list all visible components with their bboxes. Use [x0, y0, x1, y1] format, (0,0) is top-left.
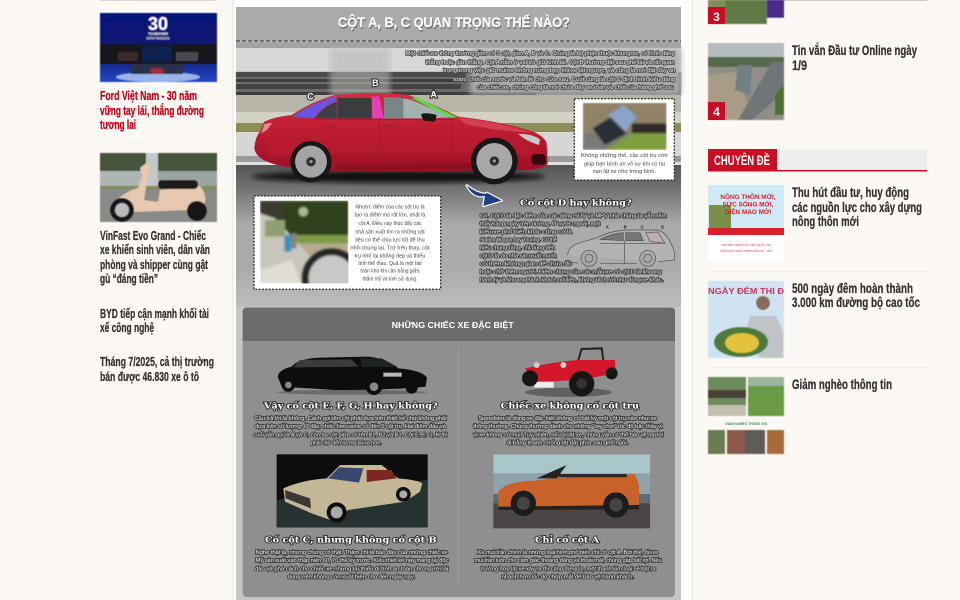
headline: Ford: Ford Việt Nam - 30 năm	[100, 89, 197, 103]
heading: Có cột D hay không?	[520, 197, 632, 208]
heading: no pillar car: Chiếc xe không có cột trụ	[501, 399, 639, 411]
text: limousine	[253, 416, 448, 447]
panel: lower special cars	[255, 454, 662, 580]
intro paragraph: thẳng hoặc gần thẳng. Cột A nằm ở vai trò giữ kính lái. Cột B thường đặt sau ghế lái và rất quan	[426, 59, 675, 66]
pillar D text: hoặc chở thêm người. Điểm chung của các mẫu xe có cột D là khoang	[480, 269, 662, 276]
text: no pillar car: thông thường. Chúng thường dành cho những "tay chơi" tốc độ bậc thầy vì	[473, 424, 663, 430]
photo: motion-blurred road background	[236, 42, 681, 307]
blind spot text: tính thể thao. Quả là một bài	[358, 260, 422, 267]
headline: 500 ngay dem: 500 ngày đêm hoàn thành	[792, 281, 913, 296]
sketch: hatchback with four pillars	[568, 230, 674, 266]
text: limousine: phải chờ đến tương lai xa hơn.	[311, 441, 382, 447]
text: convertible: mui trần luôn cho cảm giác thoáng đãng và thoải mái, chúng gặp bất lợi. Nếu	[474, 558, 662, 564]
headline: VinFast	[100, 229, 210, 286]
sketch pillar labels: C	[641, 225, 644, 230]
headline: VinFast: gù “đáng tiền”	[100, 272, 158, 286]
image: Ford 30 years event: 30	[148, 14, 168, 34]
badge 3: 3	[713, 10, 720, 24]
text: no pillar car: đi bằng thanh chống lật đặt phía sau ghế ngồi.	[507, 440, 628, 447]
title: CỘT A, B, C QUAN TRỌNG THẾ NÀO?	[339, 14, 571, 32]
text: convertible: nhanh hơn tốc độ chớp mắt để bảo vệ hành khách.	[502, 573, 634, 580]
section header	[243, 308, 675, 341]
pillar D text: hành lý và khoang hành khách nối liền, không tách rời như dòng xe khác.	[480, 278, 663, 284]
headline: Thu hut dau tu: Thu hút đầu tư, huy động	[792, 185, 909, 200]
callout: blind spot	[253, 195, 442, 290]
intro paragraph: trọng trong việc giữ mui xe không nứng bẹp khi xe lật ngược, và cũng là nơi đặt dây an	[443, 68, 675, 74]
section header: NHỮNG CHIẾC XE ĐẶC BIỆT	[392, 320, 514, 330]
pillar D text: Có. Cột D là đặc điểm của các dòng SUV và MPV nhà chúng ta vẫn nhìn	[480, 212, 667, 219]
section heading: Chuyen de: CHUYÊN ĐỀ	[714, 153, 770, 168]
text: convertible	[474, 549, 662, 580]
image: classic beige coupe	[277, 454, 428, 527]
intro paragraph: của chiếc xe, chúng cũng là nơi chứa dây an toàn và chốt của hàng ghế sau	[477, 84, 674, 91]
text: no pillar car: Speedster là dòng xe đặc biệt không có bất kỳ một cột trụ nào như xe	[478, 416, 657, 422]
heading: convertible: Chỉ có cột A	[535, 534, 599, 545]
text: coupe: dung nên không còn xuất hiện cho đến ngày nay.	[288, 574, 415, 580]
blind spot text: tạo ra điểm mù rất lớn, nhất là	[355, 212, 425, 219]
text: no pillar car	[473, 416, 663, 447]
blind spot text: thẩm mỹ và tính sử dụng.	[362, 276, 417, 283]
headline: VinFast: phòng và shipper cùng gật	[100, 258, 209, 272]
image: rural development poster	[708, 185, 784, 261]
headline: Tin van: 1/9	[792, 58, 807, 73]
panel: left news sidebar	[100, 0, 217, 384]
image: rank 3 thumbnail	[708, 0, 784, 24]
text: limousine: Câu trả lời là không. Cách gọi tên cột phải dựa trên thiết kế chứ không phải	[254, 416, 447, 422]
headline: BYD	[100, 307, 209, 335]
image: black limousine	[277, 357, 427, 395]
image: rural development poster: CHƯƠNG TRÌNH MỤC TIÊU QUỐC GIA	[721, 244, 771, 247]
callout caption: nạn lật xe như trong hình.	[593, 169, 656, 175]
blind spot text: trụ nhỏ lại không đẹp và thiếu	[355, 253, 425, 260]
image: highway interchange	[708, 43, 784, 120]
callout: rollover photo	[574, 99, 674, 180]
pillar D text: hiểu chung rằng, chỉ dùng đến	[480, 245, 555, 252]
pillar D text: Station Wagon hay Touring. Có thể	[480, 237, 557, 244]
image: red speedster	[522, 348, 618, 397]
image: orange convertible SUV	[493, 454, 650, 528]
sketch pillar labels: B	[624, 225, 627, 230]
sketch pillar labels: A	[606, 225, 610, 230]
headline: Ford: vững tay lái, thắng đường	[100, 103, 204, 118]
headline: July 2025 sales	[100, 355, 214, 384]
headline: Giam ngheo: Giảm nghèo thông tin	[792, 377, 892, 392]
arrow: to pillar D section	[467, 185, 502, 206]
callout caption: Không những thế, các cột trụ còn	[581, 153, 668, 159]
pillar D text	[480, 212, 667, 284]
text: limousine: dựa trên số lượng. Ở đây, chiếc limousine có đến 5 cột trụ. Hai điểm đầu và	[255, 423, 446, 430]
heading: limousine: Vậy có cột E, F, G, H hay không?	[263, 400, 438, 411]
image: poverty reduction collage: GIẢM NGHÈO THÔNG TIN	[725, 421, 767, 426]
pillar D text: cột D là do nhà sản xuất muốn	[480, 254, 557, 260]
image: poverty reduction collage	[708, 377, 784, 454]
image: rural development poster: XÂY DỰNG NÔNG THÔN MỚI 2021 - 2025	[720, 250, 773, 253]
blind spot text: cột A. Điều này thúc đẩy các	[358, 220, 422, 227]
callout caption	[581, 153, 668, 175]
headline: 500 ngay dem	[792, 281, 920, 310]
rear wheel	[290, 141, 332, 182]
image: Ford 30 years event: TOGETHER	[148, 32, 168, 36]
blind spot text: toán khó khi cân bằng giữa	[360, 268, 420, 275]
headline: July 2025 sales: Tháng 7/2025, cả thị trường	[100, 355, 214, 369]
text: convertible: Xe mui trần chính là những loại hình phổ biến chỉ có cột A. Bởi thế, dù xe	[478, 549, 658, 556]
headline: BYD: BYD tiếp cận mạnh khối tài	[100, 307, 209, 321]
sketch pillar labels: D	[661, 225, 664, 230]
front wheel	[471, 138, 518, 184]
blind spot text: Nhược điểm của các cột trụ là	[355, 203, 425, 210]
pillar C highlight	[292, 96, 336, 118]
pillar B highlight	[372, 97, 384, 118]
section heading: Chuyen de	[708, 149, 927, 172]
text: coupe: đáo và phá cách cho chiếc xe nhưng lại thiếu đi tính an toàn cho người lái	[255, 566, 448, 572]
pillar D text: thấy hàng ngày trên đường. Ở nước ngoài, một	[480, 220, 601, 227]
blind spot text: nhà sản xuất tìm ra những vật	[355, 229, 425, 235]
text: no pillar car: vì xe không có mui. Tuy nhiên, nếu bị lật xe, chúng vẫn có thể bảo vệ người	[473, 431, 663, 438]
label A: A	[430, 90, 437, 100]
text: limousine: cuối vẫn gọi là A và C, còn ba cột giữa có tên B1, B2 và B3. Cột E, F, G, H thì	[253, 431, 448, 438]
image: Ford 30 years event: WITH PASSION	[146, 36, 170, 40]
text: convertible: trường hợp lật xe xảy ra thì cũng đừng lo, một thanh kim loại sẽ bật ra	[481, 566, 656, 572]
badge 4: 4	[713, 105, 720, 119]
sketch pillar labels	[606, 225, 664, 230]
label C: C	[307, 91, 314, 101]
windows	[315, 102, 337, 118]
intro paragraph	[406, 51, 675, 91]
text: coupe: Nghe thật lạ, nhưng chúng có thật. Thậm chí là báo đầu của những chiếc xe	[256, 549, 448, 556]
text: coupe	[255, 549, 449, 580]
panel: special cars	[243, 308, 675, 597]
heading: coupe: Có cột C, nhưng không có cột B	[265, 534, 437, 545]
text: coupe: Mỹ sản xuất vào thập niên 60, 70 thế kỷ trước. Kiểu thiết kế này mang lại độc	[256, 557, 449, 564]
title: CỘT A, B, C QUAN TRỌNG THẾ NÀO?	[338, 13, 570, 30]
label B: B	[372, 78, 379, 88]
illustration: red sedan with coloured pillars	[252, 78, 548, 184]
headline: BYD: xế công nghệ	[100, 321, 154, 335]
page column dividers	[232, 0, 693, 600]
pillar D text: kiểu xe phổ biến khác cũng có là	[480, 229, 572, 236]
callout caption: giúp bạn bình an vô sự khi có tai	[584, 161, 665, 167]
headline: Thu hut dau tu: nông thôn mới	[792, 214, 859, 229]
panel: infographic	[236, 7, 681, 600]
image: speaker at podium: NGÀY ĐÊM THI Đ	[708, 285, 784, 296]
blind spot text: nhỏ chúng lại. Trớ trêu thay, cột	[350, 244, 430, 251]
blind spot text	[350, 203, 430, 283]
pillar D text: có thêm không gian để chứa đồ	[480, 261, 572, 268]
image: speaker at podium	[708, 281, 784, 358]
headline: Ford: tương lai	[100, 118, 136, 132]
image: rural development poster: DIỆN MẠO MỚI	[725, 207, 771, 216]
image: rural development poster: NÔNG THÔN MỚI,	[720, 192, 776, 201]
panel: right sidebar	[708, 0, 927, 454]
pillar A highlight	[412, 97, 458, 118]
headline: Tin van	[792, 43, 917, 73]
headline: Thu hut dau tu	[792, 185, 922, 229]
intro paragraph: Một chiếc xe thông thường gồm có 3 cột, gồm A, B và C. Chúng là bộ phận thuộc khung xe, có hình dáng	[406, 51, 675, 57]
image: VinFast scooter	[100, 153, 217, 222]
blind spot text: liệu có thể chịu lực tốt để thu	[355, 236, 425, 243]
car body	[254, 93, 548, 172]
photo: crashed car	[583, 103, 667, 150]
headline: VinFast: xe khiến sinh viên, dân văn	[100, 243, 210, 257]
headline: Ford	[100, 89, 204, 132]
intro paragraph: toàn, chốt của nước và bản lề cho cửa sau. Cuối cùng là cột C định hình kiểu dáng	[453, 76, 675, 83]
section: pillar D	[480, 197, 674, 284]
photo: view from driver seat	[260, 200, 348, 284]
headline: July 2025 sales: bán được 46.830 xe ô tô	[100, 370, 199, 384]
image: rural development poster: SỨC SỐNG MỚI,	[723, 198, 774, 208]
headline: VinFast: VinFast Evo Grand - Chiếc	[100, 229, 206, 243]
image: Ford 30 years event	[100, 13, 217, 82]
